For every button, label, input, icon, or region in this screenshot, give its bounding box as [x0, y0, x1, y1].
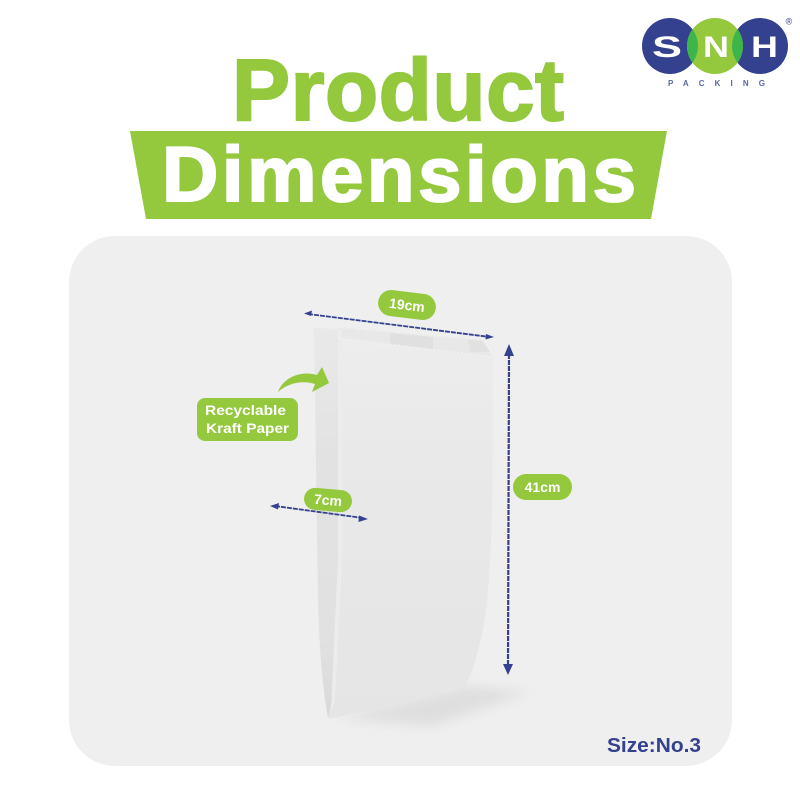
callout: Recyclable Kraft Paper: Recyclable: [205, 402, 286, 418]
arrow: height 41cm: [503, 344, 514, 675]
logo: SNH Packing: N: [703, 31, 729, 64]
callout: Recyclable Kraft Paper: [197, 398, 298, 441]
logo: SNH Packing: [642, 16, 793, 88]
logo: SNH Packing: H: [751, 31, 778, 64]
label: 19cm: 19cm: [388, 295, 426, 315]
logo: SNH Packing: S: [652, 31, 682, 64]
icon: curved green arrow: [278, 367, 329, 392]
size label: Size:No.3: [607, 735, 701, 757]
logo: SNH Packing: ®: [786, 16, 793, 26]
arrow: width 19cm: [304, 310, 494, 340]
arrow: gusset 7cm: [270, 503, 368, 522]
label: 41cm: [513, 474, 572, 500]
label: 7cm: [303, 487, 353, 513]
panel: product background: [69, 236, 732, 766]
logo: SNH Packing: PACKING: [668, 79, 765, 88]
heading banner: Dimensions: Dimensions: [162, 130, 636, 218]
label: 7cm: 7cm: [313, 491, 343, 509]
label: 41cm: 41cm: [525, 479, 560, 495]
illustration: white paper bag: [314, 327, 530, 726]
callout: Recyclable Kraft Paper: Kraft Paper: [206, 420, 290, 436]
heading: Product: Product: [232, 42, 564, 139]
label: 19cm: [377, 289, 437, 321]
